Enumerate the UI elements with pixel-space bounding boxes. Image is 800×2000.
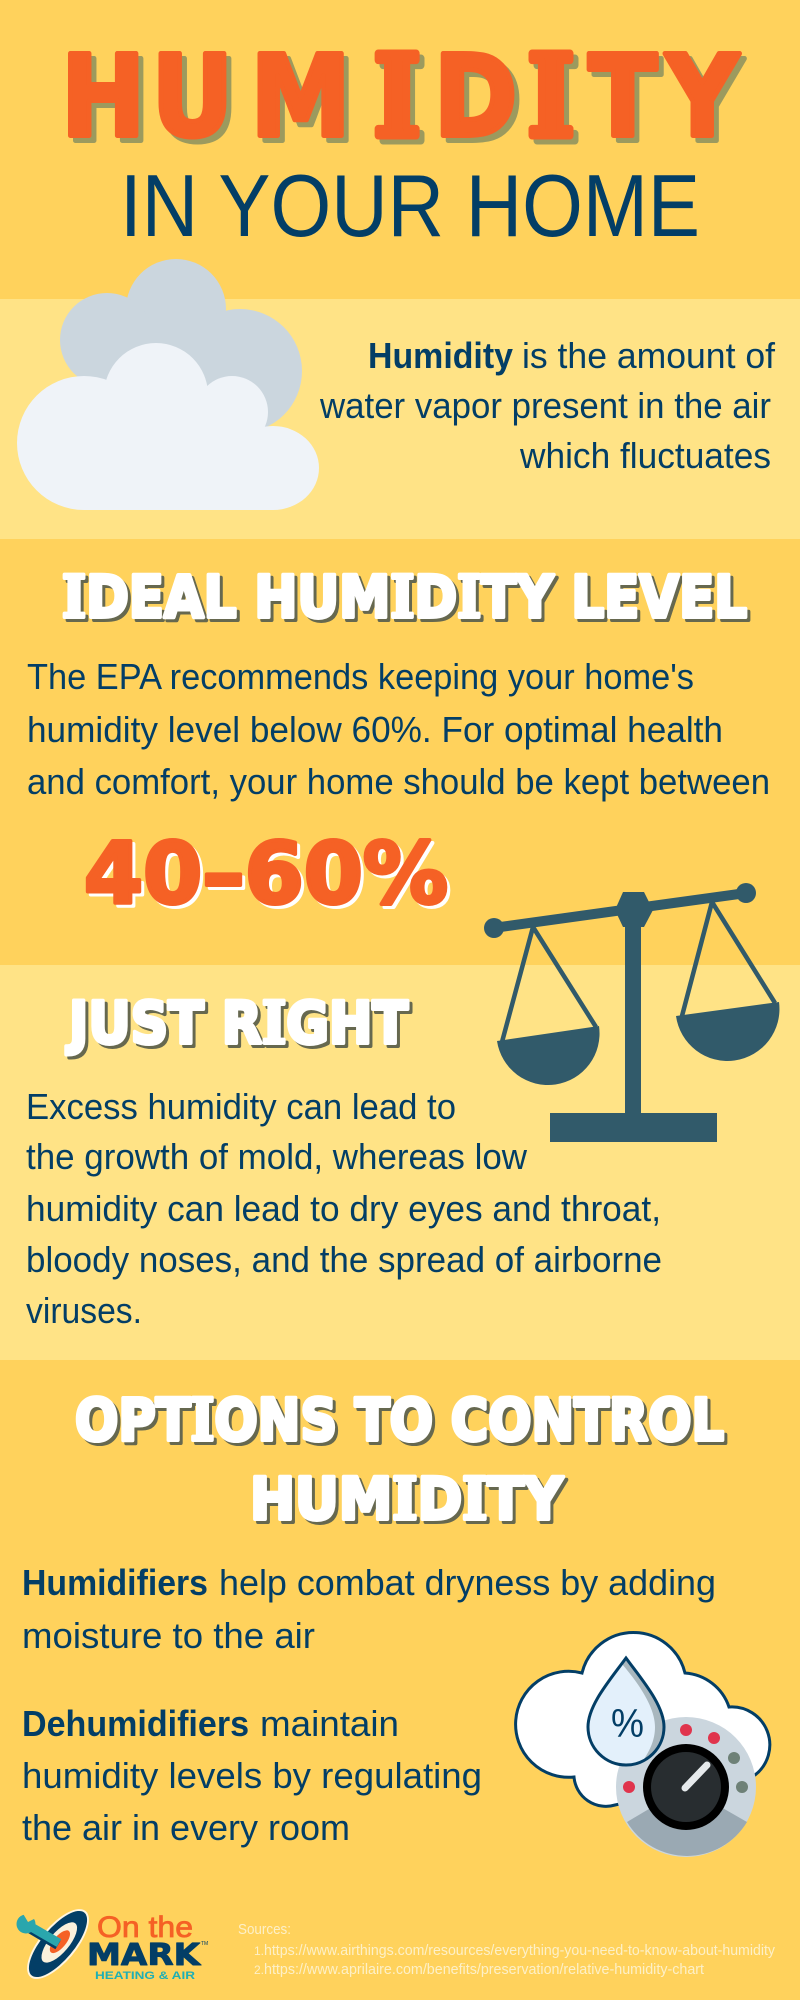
sources: Sources: bbox=[238, 1921, 291, 1938]
panel: just right band bbox=[0, 965, 800, 1360]
text block: dehumidifiers: the air in every room bbox=[22, 1807, 350, 1848]
text block: dehumidifiers: Dehumidifiers bbox=[22, 1703, 249, 1744]
title: HUMIDITY: H bbox=[61, 32, 145, 163]
title: HUMIDITY: Y bbox=[669, 37, 745, 168]
back cloud bbox=[60, 259, 302, 433]
sources: https://www.airthings.com/resources/everything-you-need-to-know-about-humidity bbox=[264, 1942, 775, 1959]
icon: humidity dial with cloud and drop bbox=[516, 1633, 770, 1857]
title: HUMIDITY: T bbox=[593, 37, 662, 168]
text block: excess humidity: the growth of mold, whereas low bbox=[26, 1136, 528, 1177]
sources: 2. bbox=[254, 1963, 264, 1977]
title: HUMIDITY: M bbox=[255, 37, 356, 168]
text block: EPA recommendation: and comfort, your home should be kept between bbox=[27, 761, 770, 802]
title: HUMIDITY: U bbox=[152, 32, 233, 163]
title: HUMIDITY: D bbox=[434, 32, 517, 163]
text block: EPA recommendation bbox=[27, 656, 770, 802]
text block: humidity definition: Humidity bbox=[368, 335, 513, 376]
text block: humidity definition: is the amount of bbox=[522, 335, 776, 376]
title: HUMIDITY: I bbox=[378, 36, 426, 168]
logo: On the Mark: On the bbox=[97, 1911, 193, 1944]
heading: options to control humidity: HUMIDITY bbox=[253, 1468, 567, 1536]
text block: excess humidity: Excess humidity can lead to bbox=[26, 1086, 456, 1127]
title: HUMIDITY: H bbox=[66, 37, 150, 168]
heading: just right: JUST RIGHT bbox=[68, 992, 411, 1060]
text block: excess humidity: viruses. bbox=[26, 1290, 142, 1331]
text block: humidifiers bbox=[22, 1562, 716, 1656]
text block: excess humidity: humidity can lead to dry eyes and throat, bbox=[26, 1188, 661, 1229]
water drop bbox=[588, 1658, 664, 1765]
title: HUMIDITY: U bbox=[157, 37, 238, 168]
text block: excess humidity bbox=[26, 1086, 662, 1331]
text block: dehumidifiers: maintain bbox=[260, 1703, 399, 1744]
heading: options to control humidity: HUMIDITY bbox=[250, 1465, 564, 1533]
icon: clouds bbox=[17, 259, 319, 510]
text block: humidity definition bbox=[319, 335, 776, 476]
title: HUMIDITY: D bbox=[439, 37, 522, 168]
sources: 1. bbox=[254, 1944, 264, 1958]
water drop: % bbox=[611, 1702, 644, 1746]
text block: humidity definition: water vapor present in the air bbox=[319, 385, 771, 426]
text block: EPA recommendation: humidity level below 60%. For optimal health bbox=[27, 709, 723, 750]
cloud outline bbox=[516, 1633, 770, 1806]
callout: 40-60%: 40–60% bbox=[84, 825, 448, 924]
wrench bbox=[16, 1912, 59, 1945]
heading: ideal humidity level: IDEAL HUMIDITY LEVEL bbox=[62, 563, 747, 631]
logo: On the Mark: TM bbox=[201, 1941, 208, 1947]
text block: EPA recommendation: The EPA recommends keeping your home's bbox=[27, 656, 694, 697]
logo: On the Mark: MARK bbox=[87, 1938, 202, 1973]
heading: options to control humidity: OPTIONS TO CONTROL bbox=[75, 1386, 724, 1454]
title: HUMIDITY: I bbox=[374, 31, 421, 163]
logo: On the Mark bbox=[16, 1899, 208, 1989]
text block: dehumidifiers: humidity levels by regulating bbox=[22, 1755, 482, 1796]
title: HUMIDITY: I bbox=[527, 31, 575, 163]
title: HUMIDITY: Y bbox=[664, 32, 740, 163]
text block: humidifiers: help combat dryness by adding bbox=[219, 1562, 716, 1603]
heading: ideal humidity level: IDEAL HUMIDITY LEVEL bbox=[65, 566, 750, 634]
text block: excess humidity: bloody noses, and the spread of airborne bbox=[26, 1239, 662, 1280]
text block: dehumidifiers bbox=[22, 1703, 482, 1848]
text block: humidifiers: moisture to the air bbox=[22, 1615, 315, 1656]
sources bbox=[238, 1921, 775, 1978]
sources: https://www.aprilaire.com/benefits/preservation/relative-humidity-chart bbox=[264, 1961, 705, 1978]
text block: humidifiers: Humidifiers bbox=[22, 1562, 208, 1603]
target bbox=[17, 1899, 99, 1989]
text block: humidity definition: which fluctuates bbox=[519, 435, 771, 476]
callout: 40-60%: 40–60% bbox=[87, 828, 451, 927]
logo: On the Mark: HEATING & AIR bbox=[95, 1970, 195, 1982]
heading: just right: JUST RIGHT bbox=[65, 989, 408, 1057]
panel: humidity definition band bbox=[0, 299, 800, 539]
heading: options to control humidity bbox=[75, 1386, 727, 1536]
dial bbox=[616, 1717, 756, 1857]
title: HUMIDITY: T bbox=[588, 32, 657, 163]
title: HUMIDITY: M bbox=[250, 32, 351, 163]
subtitle: in your home: IN YOUR HOME bbox=[120, 156, 700, 255]
title: HUMIDITY: I bbox=[532, 36, 580, 168]
heading: options to control humidity: OPTIONS TO CONTROL bbox=[78, 1389, 727, 1457]
front cloud bbox=[17, 343, 319, 510]
title: HUMIDITY bbox=[61, 31, 745, 168]
icon: balance scale bbox=[484, 883, 779, 1142]
